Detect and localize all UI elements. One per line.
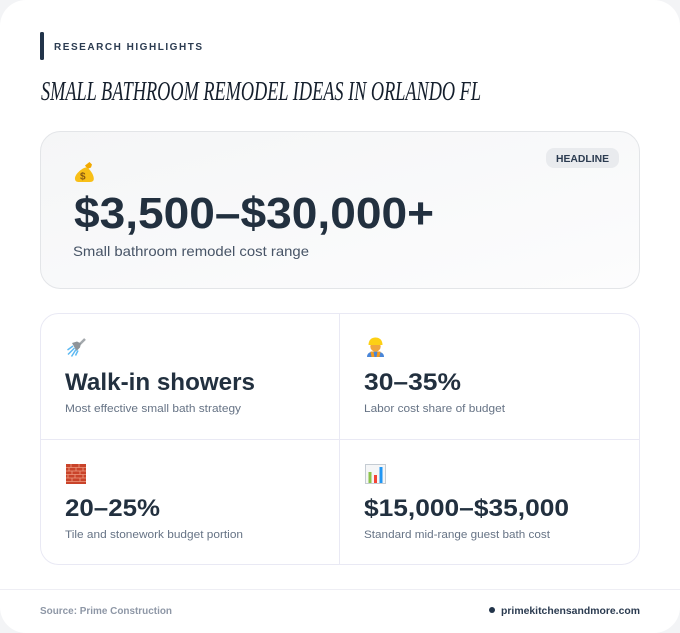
stat: walk-in showers — [65, 339, 255, 415]
title: SMALL BATHROOM REMODEL IDEAS IN ORLANDO FL — [41, 76, 481, 106]
stat: cost range: $3,500–$30,000+ — [74, 189, 434, 238]
stat label: Small bathroom remodel cost range — [73, 243, 309, 259]
panel: headline cost — [40, 132, 640, 288]
badge: headline: HEADLINE — [556, 153, 609, 165]
stat: mid-range guest bath: Standard mid-range guest bath cost — [364, 529, 550, 541]
stat: tile and stonework: Tile and stonework budget portion — [65, 529, 243, 541]
stat: labor share: 30–35% — [364, 369, 461, 396]
source: Source: Prime Construction — [40, 606, 172, 617]
website: primekitchensandmore.com — [501, 606, 640, 617]
section label: RESEARCH HIGHLIGHTS — [54, 42, 202, 53]
stat: mid-range guest bath: $15,000–$35,000 — [364, 495, 569, 522]
icon: construction worker — [367, 338, 384, 357]
stat: tile and stonework — [65, 464, 243, 541]
icon: shower head — [68, 339, 85, 356]
icon: bar chart — [366, 464, 386, 484]
panel: stat grid — [40, 314, 640, 564]
section label — [40, 32, 202, 60]
badge: headline — [546, 148, 619, 168]
stat: walk-in showers: Most effective small bath strategy — [65, 403, 242, 415]
stat: walk-in showers: Walk-in showers — [65, 369, 255, 396]
stat: mid-range guest bath — [364, 464, 569, 541]
stat: labor share — [364, 338, 505, 415]
footer — [0, 590, 680, 617]
icon: bricks — [66, 464, 86, 484]
icon: money bag — [75, 162, 94, 182]
stat: labor share: Labor cost share of budget — [364, 403, 505, 415]
icon: money bag: $ — [80, 172, 86, 182]
stat: tile and stonework: 20–25% — [65, 495, 160, 522]
